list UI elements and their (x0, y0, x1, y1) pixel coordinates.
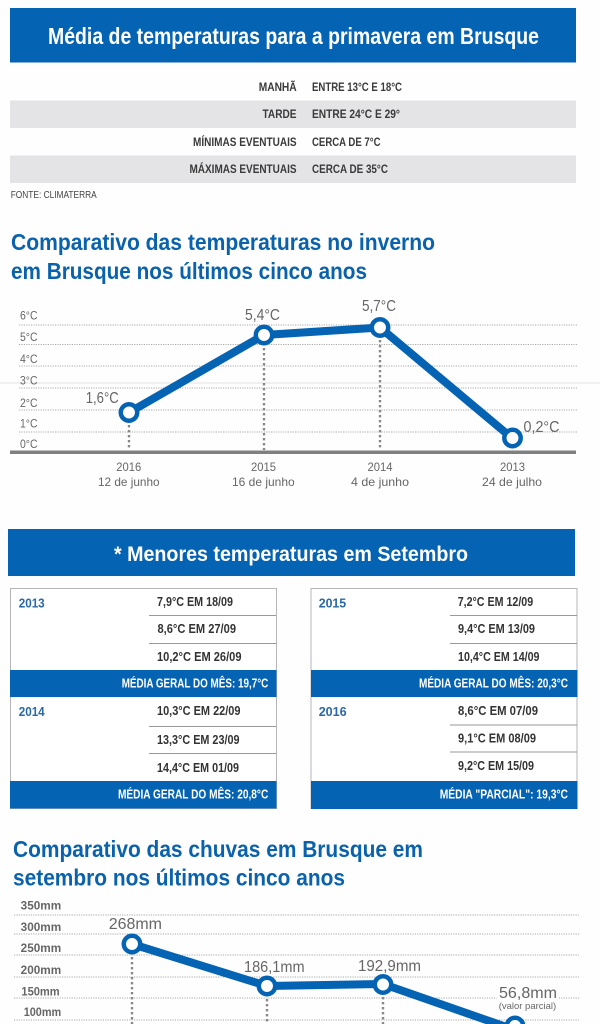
table: temperaturas da primavera: ENTRE 24°C E 29° (312, 107, 400, 121)
values 2015: 9,4°C EM 13/09 (458, 622, 535, 636)
heading: comparativo das chuvas: setembro nos últimos cinco anos (13, 864, 345, 890)
y axis labels (20, 310, 38, 451)
panel: setembro 2015 e 2016 (311, 588, 578, 809)
data labels: 268mm (109, 916, 162, 933)
table: temperaturas da primavera: ENTRE 13°C E 18°C (312, 80, 402, 94)
values 2016: 9,1°C EM 08/09 (458, 732, 536, 746)
data labels: 56,8mm (499, 985, 557, 1002)
y axis labels: 1°C (20, 419, 38, 431)
source note: FONTE: CLIMATERRA (11, 190, 97, 201)
data labels: 5,4°C (245, 307, 280, 324)
values 2014: 13,3°C EM 23/09 (157, 733, 240, 747)
year 2014: 2014 (19, 704, 45, 719)
y axis labels: 0°C (20, 439, 38, 451)
data labels (86, 298, 559, 436)
year 2016: 2016 (319, 704, 347, 719)
values 2016: 8,6°C EM 07/09 (458, 704, 538, 718)
table: temperaturas da primavera: CERCA DE 35°C (312, 162, 388, 176)
x axis labels: 24 de julho (482, 475, 542, 489)
values 2013 (157, 595, 242, 664)
data labels: 5,7°C (362, 298, 396, 315)
y axis labels: 6°C (20, 310, 38, 322)
heading: comparativo das chuvas: Comparativo das chuvas em Brusque em (13, 836, 423, 862)
header: menores temperaturas: * Menores temperaturas em Setembro (114, 543, 468, 566)
line chart: temperaturas no inverno (10, 298, 577, 489)
data labels: 186,1mm (244, 959, 305, 976)
values 2013: 8,6°C EM 27/09 (158, 622, 236, 636)
x axis labels: 4 de junho (351, 475, 409, 489)
values 2013: 10,2°C EM 26/09 (157, 650, 242, 664)
x axis labels: 2013 (500, 460, 525, 474)
y axis labels: 350mm (21, 900, 61, 912)
data labels (109, 916, 557, 1012)
y axis labels: 200mm (21, 965, 61, 977)
line chart: chuvas em setembro (14, 900, 579, 1024)
values 2014 (157, 704, 241, 775)
heading: comparativo das temperaturas (11, 229, 435, 284)
data labels: (valor parcial) (499, 1001, 556, 1012)
y axis labels (21, 900, 61, 1019)
average 2014: MÉDIA GERAL DO MÊS: 20,8°C (118, 786, 268, 802)
values 2015: 10,4°C EM 14/09 (458, 650, 540, 664)
data labels: 0,2°C (524, 419, 560, 436)
y axis labels: 250mm (21, 943, 61, 955)
table: temperaturas da primavera: TARDE (262, 107, 296, 121)
average 2016: MÉDIA "PARCIAL": 19,3°C (440, 786, 568, 802)
values 2013: 7,9°C EM 18/09 (157, 595, 233, 609)
panel: setembro 2013 e 2014 (10, 588, 276, 808)
values 2014: 14,4°C EM 01/09 (157, 761, 239, 775)
y axis labels: 4°C (20, 354, 38, 366)
table: temperaturas da primavera: CERCA DE 7°C (312, 135, 381, 149)
table: temperaturas da primavera: MÁXIMAS EVENTUAIS (190, 161, 296, 176)
heading: comparativo das chuvas (13, 836, 423, 890)
table: temperaturas da primavera (10, 79, 576, 183)
y axis labels: 100mm (24, 1007, 61, 1019)
x axis labels: 2014 (368, 460, 393, 474)
y axis labels: 2°C (20, 398, 38, 410)
y axis labels: 150mm (21, 986, 60, 998)
data labels: 1,6°C (86, 390, 119, 407)
x axis labels: 2015 (251, 460, 276, 474)
y axis labels: 3°C (20, 376, 38, 388)
header: média de temperaturas (10, 8, 576, 62)
x axis labels (98, 460, 542, 489)
values 2014: 10,3°C EM 22/09 (157, 704, 241, 718)
values 2015 (458, 595, 540, 664)
heading: comparativo das temperaturas: em Brusque nos últimos cinco anos (11, 258, 367, 284)
average 2015: MÉDIA GERAL DO MÊS: 20,3°C (419, 676, 568, 690)
year 2013: 2013 (19, 596, 45, 610)
x axis labels: 12 de junho (98, 475, 160, 489)
heading: comparativo das temperaturas: Comparativo das temperaturas no inverno (11, 229, 435, 255)
x axis labels: 16 de junho (232, 475, 295, 489)
year 2015: 2015 (319, 596, 346, 610)
values 2015: 7,2°C EM 12/09 (458, 595, 533, 609)
y axis labels: 5°C (20, 332, 38, 344)
y axis labels: 300mm (21, 922, 61, 934)
values 2016 (458, 704, 538, 773)
header: menores temperaturas (8, 529, 575, 576)
data labels: 192,9mm (358, 958, 421, 975)
x axis labels: 2016 (116, 460, 142, 474)
table: temperaturas da primavera: MÍNIMAS EVENTUAIS (193, 134, 297, 149)
average 2013: MÉDIA GERAL DO MÊS: 19,7°C (122, 676, 268, 690)
values 2016: 9,2°C EM 15/09 (458, 759, 534, 773)
table: temperaturas da primavera: MANHÃ (259, 79, 297, 94)
